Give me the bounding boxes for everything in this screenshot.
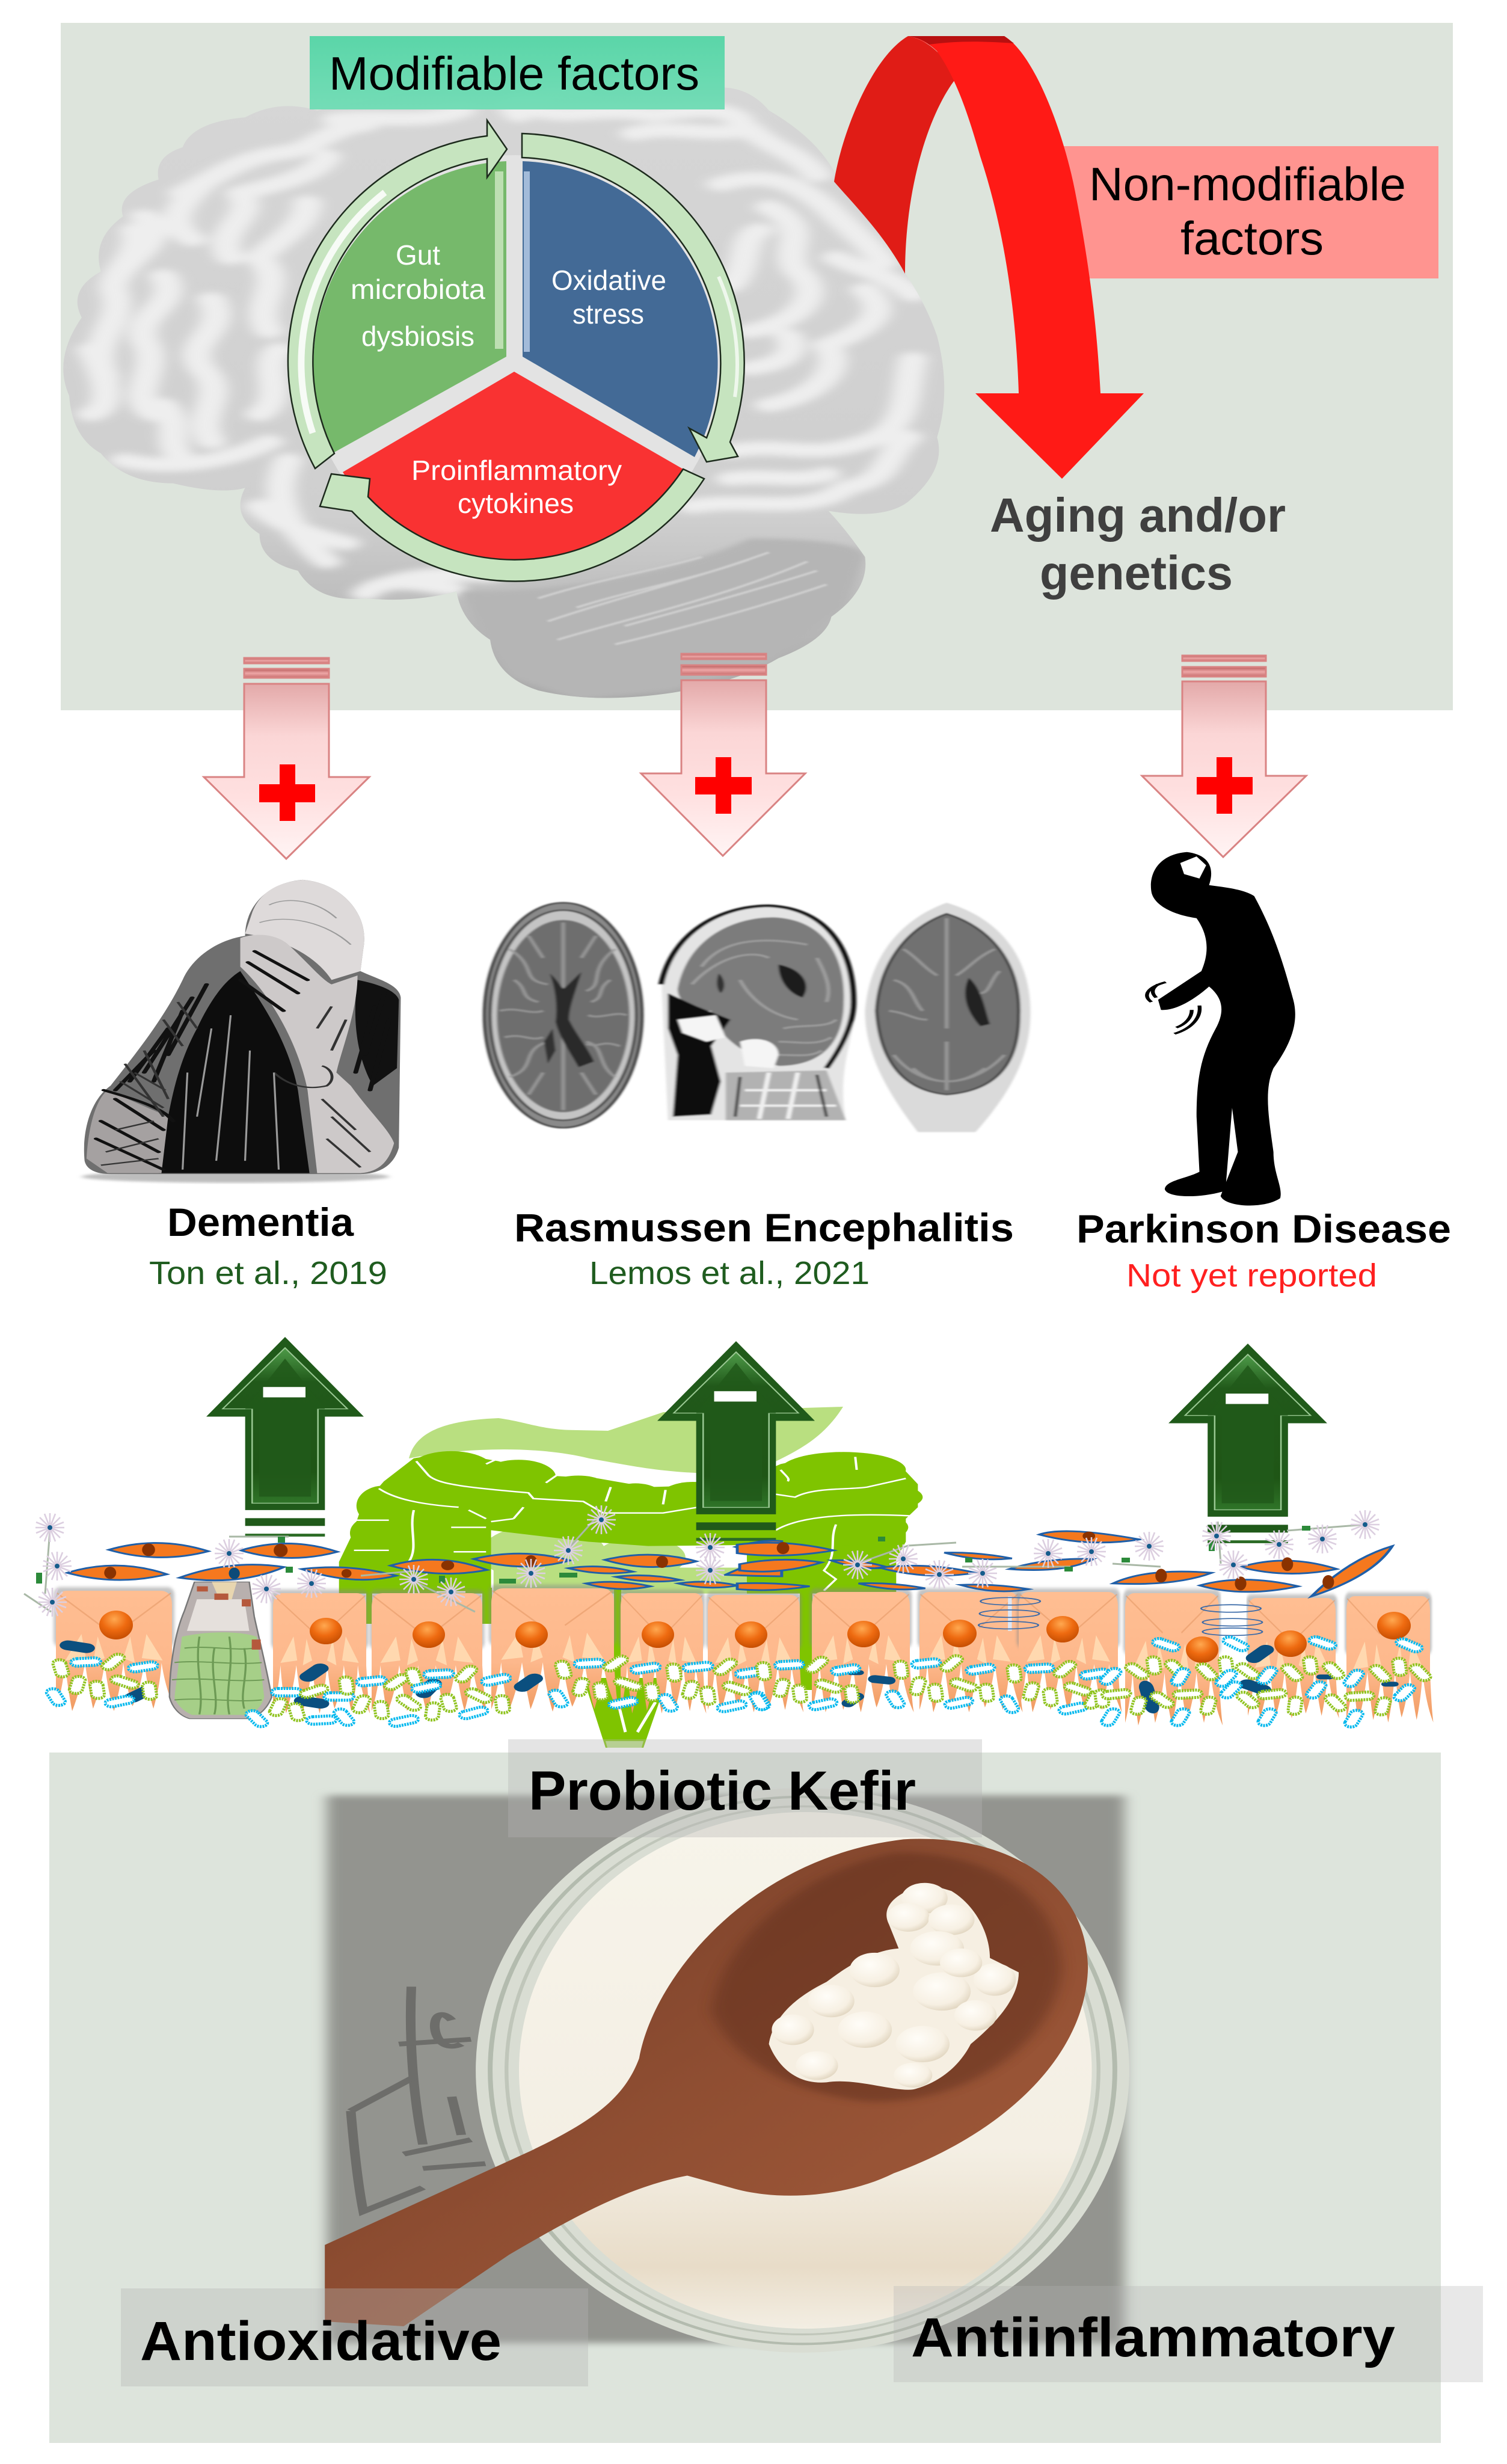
cell 4 <box>369 1590 486 1713</box>
arrow: ring segment red to green <box>320 469 704 582</box>
image: brain MRI scans <box>484 903 1031 1132</box>
label: Modifiable factors: Modifiable factors <box>329 47 699 100</box>
gaps behind cells and lower funnel <box>366 1588 812 1748</box>
MRI coronal slice <box>865 903 1031 1132</box>
MRI sagittal slice <box>661 905 855 1120</box>
label: Antioxidative <box>121 2288 588 2386</box>
label: Non-modifiable factors <box>1055 146 1438 278</box>
label: Probiotic Kefir <box>508 1739 982 1837</box>
silhouette: person with Parkinson disease <box>1147 852 1295 1205</box>
label: Non-modifiable factors: factors <box>1180 212 1324 265</box>
gland with goblet cells <box>170 1582 272 1719</box>
label: Rasmussen Encephalitis: Lemos et al., 2021 <box>589 1255 870 1291</box>
kefir grains <box>769 1883 1019 2090</box>
stromal fibroblast cells right <box>737 1531 1392 1596</box>
intestinal epithelium cells <box>54 1582 1434 1725</box>
neurons and glia <box>24 1505 1380 1617</box>
colon lobes left <box>339 1451 782 1594</box>
cell 5 <box>489 1585 619 1712</box>
label: Dementia: Ton et al., 2019 <box>149 1255 387 1291</box>
sector: gut microbiota dysbiosis <box>313 161 506 452</box>
sector: oxidative stress: stress <box>572 298 644 330</box>
cell 3 <box>271 1590 370 1713</box>
label: Parkinson Disease <box>1076 1206 1451 1294</box>
cell 8 <box>810 1588 914 1712</box>
arrow: red down plus to dementia <box>204 658 369 859</box>
colon lobes right <box>747 1452 922 1594</box>
panel: kefir background <box>49 1753 1441 2443</box>
image: person with dementia <box>82 880 401 1183</box>
arrow: ring segment blue to red <box>522 134 744 462</box>
sector: proinflammatory cytokines <box>343 372 683 564</box>
cycle diagram: modifiable factors <box>288 120 744 582</box>
arrow: green up minus from gut to parkinson <box>1168 1344 1327 1543</box>
sector: proinflammatory cytokines: cytokines <box>458 488 574 519</box>
label: Antiinflammatory <box>894 2286 1483 2382</box>
label: Rasmussen Encephalitis: Rasmussen Encephalitis <box>514 1205 1014 1250</box>
brain illustration <box>58 78 951 704</box>
text: Aging and/or genetics <box>990 488 1286 600</box>
cell 7 <box>706 1591 803 1712</box>
pale transverse colon <box>409 1407 843 1473</box>
illustration: intestine <box>339 1407 922 1748</box>
label: Rasmussen Encephalitis <box>514 1205 1014 1291</box>
panel: risk factors background <box>61 23 1453 710</box>
label: Dementia: Dementia <box>167 1200 354 1244</box>
text: Aging and/or genetics: genetics <box>1040 546 1233 600</box>
sector: gut microbiota dysbiosis: microbiota <box>351 274 485 305</box>
cell 1 <box>54 1587 177 1711</box>
jar clasp <box>351 1986 485 2211</box>
sector: proinflammatory cytokines: Proinflammatory <box>411 455 622 486</box>
MRI axial slice <box>484 903 642 1128</box>
arrow: large red curved arrow <box>834 36 1144 479</box>
cell 9b <box>1017 1588 1122 1712</box>
arrow: green up minus from gut to rasmussen <box>657 1341 815 1541</box>
microbiota bacteria left <box>45 1639 772 1728</box>
microbiota bacteria right <box>748 1635 1433 1728</box>
arrow: red down plus to parkinson <box>1142 656 1306 857</box>
sector: gut microbiota dysbiosis: dysbiosis <box>361 321 474 352</box>
label: Parkinson Disease: Parkinson Disease <box>1076 1206 1451 1251</box>
cell nuclei <box>99 1611 1411 1663</box>
label: Antioxidative: Antioxidative <box>140 2311 502 2372</box>
label: Dementia <box>149 1200 387 1291</box>
sector: gut microbiota dysbiosis: Gut <box>396 239 440 271</box>
cell 11 <box>1246 1594 1339 1718</box>
label: Antiinflammatory: Antiinflammatory <box>911 2307 1395 2368</box>
cell 9 <box>918 1588 1023 1712</box>
cell 10 <box>1123 1589 1223 1725</box>
arrow: ring segment green to blue <box>288 120 507 469</box>
cell 6 <box>619 1590 706 1713</box>
photo: kefir grains on a wooden spoon <box>325 1788 1129 2353</box>
label: Non-modifiable factors: Non-modifiable <box>1089 158 1406 210</box>
wooden spoon <box>325 1839 1088 2326</box>
tremor marks <box>1147 982 1200 1034</box>
sector: oxidative stress <box>523 161 718 457</box>
cell 12 <box>1345 1593 1434 1722</box>
arrow: green up minus from gut to dementia <box>206 1337 364 1537</box>
stromal fibroblast cells left <box>67 1541 782 1589</box>
label: Parkinson Disease: Not yet reported <box>1126 1258 1377 1294</box>
arrow: red down plus to rasmussen <box>641 654 805 856</box>
label: Modifiable factors <box>310 36 725 109</box>
text: Aging and/or genetics: Aging and/or <box>990 488 1286 542</box>
sector: oxidative stress: Oxidative <box>551 265 666 296</box>
tight junction rings <box>978 1594 1262 1636</box>
label: Probiotic Kefir: Probiotic Kefir <box>529 1760 916 1822</box>
